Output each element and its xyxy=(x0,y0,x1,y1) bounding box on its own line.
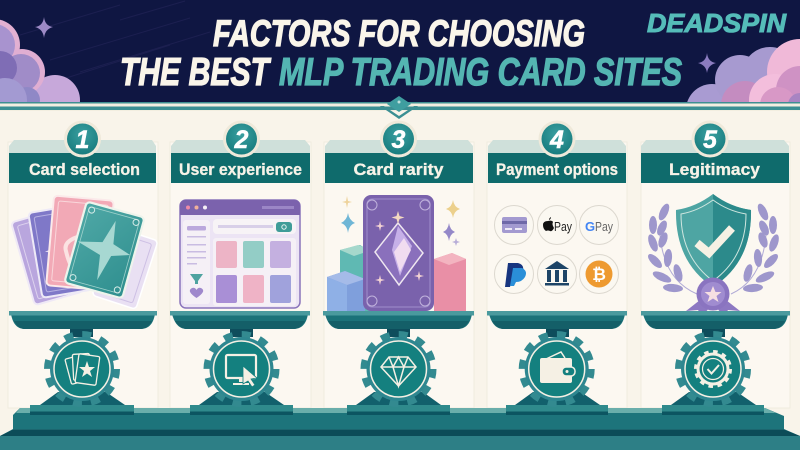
number badge 5 xyxy=(692,120,728,158)
illustration: fan of cards xyxy=(11,196,158,309)
title: THE BEST xyxy=(120,51,271,94)
title: FACTORS FOR CHOOSING xyxy=(213,13,585,54)
icon: cards with star xyxy=(65,353,100,385)
heading tab 3 xyxy=(325,140,473,183)
number badge 1 xyxy=(64,120,101,158)
heading tab 1 xyxy=(9,140,156,183)
icon: diamond xyxy=(381,357,416,386)
number badge 3 xyxy=(380,120,417,158)
header banner xyxy=(0,0,800,104)
icon: Google Pay: Pay xyxy=(595,219,613,234)
title: MLP TRADING CARD SITES xyxy=(279,51,682,94)
illustration: rare card with bars xyxy=(327,195,466,311)
number badge 2 xyxy=(223,120,260,158)
icon: Google Pay: G xyxy=(585,219,595,234)
heading tab 2 xyxy=(171,140,310,183)
shelf 1 xyxy=(9,311,157,329)
gear pedestal 1: cards icon xyxy=(30,329,134,415)
icon: monitor with cursor xyxy=(226,355,257,387)
number badge 4 xyxy=(538,120,576,158)
panel 3: card rarity xyxy=(323,120,474,329)
title xyxy=(120,13,682,94)
panel 2: user experience xyxy=(170,120,310,329)
icon: Apple Pay: Pay xyxy=(554,219,572,234)
right cloud xyxy=(687,39,800,102)
number badge 4: 4 xyxy=(549,126,564,154)
icon: check seal xyxy=(696,352,730,386)
heading tab 3: Card rarity xyxy=(354,160,444,179)
heading tab 2: User experience xyxy=(179,160,302,179)
shelf 2 xyxy=(170,311,310,329)
icon: Bitcoin: ₿ xyxy=(592,265,606,285)
number badge 2: 2 xyxy=(234,126,249,154)
bottom platform xyxy=(0,408,800,450)
illustration: browser window xyxy=(180,200,300,308)
logo: Deadspin: DEADSPIN xyxy=(647,8,787,38)
number badge 3: 3 xyxy=(392,126,406,154)
heading tab 5: Legitimacy xyxy=(669,160,761,179)
heading tab 1: Card selection xyxy=(29,160,140,179)
heading tab 4 xyxy=(488,140,626,183)
panel 5: legitimacy xyxy=(641,120,790,329)
heading tab 5 xyxy=(641,140,789,183)
icon: wallet xyxy=(540,352,575,383)
shelf 3 xyxy=(323,311,474,329)
left cloud xyxy=(0,20,80,102)
panel 4: payment options xyxy=(487,120,627,329)
number badge 1: 1 xyxy=(76,126,89,154)
icon: PayPal xyxy=(505,263,526,287)
number badge 5: 5 xyxy=(703,126,718,154)
gear pedestal 5: verified badge icon xyxy=(662,329,764,415)
sparkle right xyxy=(698,53,716,73)
illustration: shield with laurels xyxy=(646,194,781,316)
shelf 5 xyxy=(641,311,790,329)
gear pedestal 3: diamond icon xyxy=(347,329,450,415)
icon: bank xyxy=(545,261,569,286)
gear pedestal 4: wallet icon xyxy=(506,329,608,415)
icon: credit card xyxy=(502,217,527,233)
sparkle left xyxy=(35,17,53,38)
panel 1: card selection xyxy=(9,120,158,329)
payment icons xyxy=(494,206,618,294)
shelf 4 xyxy=(487,311,627,329)
heading tab 4: Payment options xyxy=(496,160,618,179)
header divider band xyxy=(0,96,800,119)
gear pedestal 2: monitor icon xyxy=(190,329,293,415)
icon: Google Pay xyxy=(585,219,613,234)
column panel frames xyxy=(8,142,790,408)
